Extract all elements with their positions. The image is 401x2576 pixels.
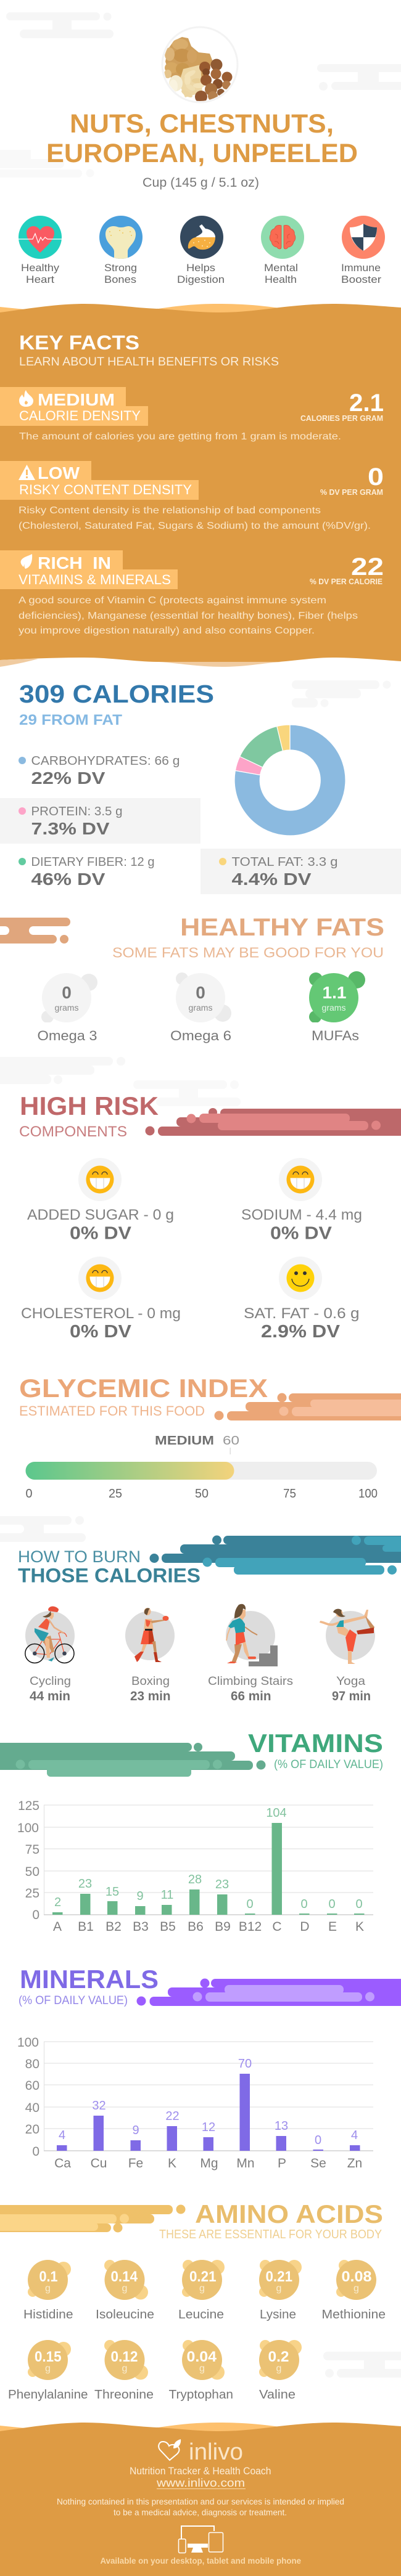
benefit labels: Digestion — [177, 274, 225, 285]
panel: key facts — [0, 304, 401, 667]
icon: mental health — [261, 216, 304, 259]
donut chart — [234, 725, 345, 836]
decoration: teal stripes — [149, 1536, 401, 1575]
bar chart: minerals: K — [168, 2156, 176, 2170]
bar chart: vitamins: 0 — [32, 1908, 39, 1922]
nutrient: dietary fiber: 46% DV — [31, 870, 105, 889]
exercise: yoga — [320, 1609, 375, 1664]
bar chart: minerals: 32 — [92, 2099, 106, 2113]
decorative clouds — [0, 1057, 241, 1106]
food image: nuts — [162, 27, 238, 103]
gauge value: 60 — [223, 1434, 239, 1448]
icon: warning — [19, 465, 35, 480]
bar chart: vitamins: 100 — [17, 1821, 39, 1835]
metric: mufas: MUFAs — [312, 1028, 359, 1043]
amino: tryptophan: g — [199, 2363, 205, 2374]
bar chart: minerals: 4 — [59, 2129, 65, 2142]
decoration: minerals stripes — [137, 1978, 401, 2006]
gauge bar — [26, 1462, 377, 1480]
component: added sugar — [27, 1158, 174, 1244]
gauge value: MEDIUM — [155, 1434, 214, 1448]
heading: glycemic index: GLYCEMIC INDEX — [19, 1374, 268, 1403]
bar chart: vitamins — [17, 1799, 373, 1934]
benefit labels: Mental — [264, 262, 298, 274]
fact: calorie density — [0, 387, 384, 442]
amino: phenylalanine: 0.15 — [35, 2349, 62, 2365]
amino: isoleucine: Isoleucine — [96, 2308, 154, 2321]
amino: threonine — [94, 2340, 154, 2402]
bar chart: vitamins: 9 — [136, 1889, 144, 1903]
amino: valine — [259, 2340, 302, 2402]
exercise labels: Yoga — [336, 1675, 365, 1688]
component: saturated fat: 2.9% DV — [261, 1322, 341, 1342]
fact: rich in vitamins and minerals — [0, 550, 384, 636]
fact: calorie density: CALORIE DENSITY — [19, 408, 141, 423]
metric: omega 3: Omega 3 — [37, 1028, 97, 1043]
amino: lysine: g — [276, 2283, 281, 2294]
amino: threonine: 0.12 — [111, 2349, 138, 2365]
subheading: (% OF DAILY VALUE) — [19, 1994, 128, 2007]
panel: glycemic index — [19, 1374, 401, 1501]
bar chart: vitamins: B12 — [239, 1920, 262, 1934]
bar chart: vitamins: 125 — [18, 1799, 39, 1813]
exercise: cycling — [25, 1607, 75, 1663]
amino: isoleucine: 0.14 — [111, 2268, 138, 2285]
icon: strong bones — [99, 216, 143, 262]
gauge axis — [26, 1487, 378, 1501]
exercise durations: 44 min — [30, 1689, 70, 1703]
panel: amino acids — [0, 2199, 386, 2402]
subheading: from fat: 29 FROM FAT — [19, 712, 122, 728]
component: cholesterol: CHOLESTEROL - 0 mg — [21, 1305, 181, 1322]
benefit labels: Immune — [341, 262, 381, 274]
benefit labels: Booster — [341, 274, 381, 285]
bar chart: vitamins: B1 — [78, 1920, 94, 1934]
icon: leaf — [21, 554, 32, 569]
heading: minerals: MINERALS — [20, 1965, 159, 1994]
component: sodium — [241, 1158, 362, 1244]
bar chart: minerals: Cu — [91, 2156, 107, 2170]
bar chart: vitamins: 25 — [25, 1886, 39, 1901]
fact: calorie density: MEDIUM — [38, 390, 115, 409]
benefit labels: Healthy — [21, 262, 60, 274]
gauge value — [155, 1434, 239, 1454]
bar chart: vitamins: 15 — [105, 1885, 119, 1899]
heading: those calories: THOSE CALORIES — [18, 1564, 200, 1586]
metric: omega 6: Omega 6 — [170, 1028, 231, 1043]
metric: mufas — [309, 971, 365, 1043]
gauge axis: 25 — [109, 1487, 122, 1501]
amino: histidine: Histidine — [23, 2308, 73, 2321]
fact: rich in vitamins and minerals: deficiencies), Manganese (essential for healthy bones), Fiber (helps — [19, 611, 358, 621]
exercise labels: Boxing — [131, 1675, 170, 1688]
exercise: boxing — [125, 1608, 175, 1662]
amino: histidine: 0.1 — [39, 2268, 58, 2285]
bar chart: vitamins: 23 — [215, 1878, 229, 1891]
amino: methionine: g — [353, 2283, 359, 2294]
nutrient: carbohydrates — [19, 754, 180, 788]
nutrient: protein: 7.3% DV — [31, 819, 110, 838]
panel: healthy fats — [0, 914, 384, 1043]
exercise labels: Climbing Stairs — [208, 1675, 293, 1688]
amino: valine: Valine — [259, 2388, 296, 2402]
benefit labels: Health — [265, 274, 297, 285]
website: www.inlivo.com — [156, 2477, 245, 2489]
panel: vitamins — [0, 1729, 383, 1934]
metric: omega 6: 0 — [196, 983, 205, 1002]
heading: vitamins: VITAMINS — [248, 1729, 383, 1758]
amino: tryptophan: Tryptophan — [169, 2388, 233, 2402]
bar chart: minerals — [17, 2036, 373, 2170]
bar chart: minerals: 9 — [132, 2124, 139, 2137]
logo: inlivo — [189, 2439, 243, 2465]
icon: digestion — [180, 216, 223, 259]
nutrient: protein: PROTEIN: 3.5 g — [31, 805, 122, 818]
exercise durations: 97 min — [332, 1689, 371, 1703]
nutrient: dietary fiber: DIETARY FIBER: 12 g — [31, 855, 154, 869]
disclaimer: Nothing contained in this presentation and our services is intended or implied — [57, 2497, 344, 2506]
title — [46, 109, 358, 168]
bar chart: vitamins: 11 — [161, 1888, 173, 1902]
amino: phenylalanine: Phenylalanine — [8, 2388, 88, 2402]
bar chart: vitamins: B2 — [105, 1920, 122, 1934]
component: added sugar: 0% DV — [70, 1224, 132, 1244]
component: sodium: SODIUM - 4.4 mg — [241, 1207, 362, 1223]
health benefits row — [19, 216, 385, 285]
exercise: climbing stairs — [226, 1604, 278, 1666]
bar chart: minerals: 100 — [17, 2036, 39, 2050]
bar chart: minerals: Zn — [347, 2156, 362, 2170]
decoration: vitamins stripes — [0, 1743, 265, 1777]
fact: risky content density: RISKY CONTENT DENSITY — [19, 482, 192, 497]
amino: methionine — [322, 2260, 386, 2321]
fact: rich in vitamins and minerals: A good source of Vitamin C (protects against immune system — [19, 595, 326, 606]
benefit labels — [21, 262, 381, 285]
bar chart: minerals: 4 — [351, 2129, 358, 2142]
amino: tryptophan: 0.04 — [186, 2349, 217, 2365]
amino: phenylalanine — [8, 2340, 88, 2402]
nutrient: total fat — [200, 849, 401, 894]
decoration: glycemic stripes — [215, 1393, 401, 1420]
nutrient: total fat: TOTAL FAT: 3.3 g — [232, 855, 338, 869]
subheading: ESTIMATED FOR THIS FOOD — [19, 1403, 205, 1419]
bar chart: minerals: 22 — [165, 2109, 180, 2123]
bar chart: vitamins: 28 — [188, 1873, 202, 1886]
bar chart: vitamins: 0 — [246, 1897, 254, 1911]
subheading: THESE ARE ESSENTIAL FOR YOUR BODY — [159, 2228, 382, 2241]
amino: methionine: Methionine — [322, 2308, 386, 2321]
fact: risky content density: Risky Content density is the relationship of bad components — [19, 505, 321, 516]
bar chart: minerals: 13 — [275, 2119, 288, 2133]
bar chart: vitamins: B6 — [188, 1920, 204, 1934]
panel: calories — [0, 680, 401, 894]
bar chart: vitamins: 23 — [78, 1877, 92, 1891]
title: NUTS, CHESTNUTS, — [70, 109, 334, 139]
bar chart: vitamins: E — [328, 1920, 337, 1934]
exercise durations: 23 min — [130, 1689, 170, 1703]
amino: tryptophan — [169, 2340, 233, 2402]
bar chart: minerals: 40 — [25, 2101, 39, 2115]
exercise durations: 66 min — [231, 1689, 271, 1703]
exercise labels: Cycling — [30, 1675, 71, 1688]
fact: calorie density: 2.1 — [349, 389, 384, 417]
metric: mufas: grams — [322, 1003, 345, 1013]
disclaimer — [57, 2497, 344, 2517]
amino: phenylalanine: g — [45, 2363, 51, 2374]
bar chart: minerals: Mn — [236, 2156, 255, 2170]
metric: omega 6: grams — [189, 1003, 212, 1013]
disclaimer: to be a medical advice, diagnosis or treatment. — [114, 2507, 287, 2517]
bar chart: vitamins: A — [53, 1920, 62, 1934]
bar chart: minerals: Se — [310, 2156, 326, 2170]
heading: calories: 309 CALORIES — [19, 680, 214, 708]
bar chart: vitamins: B5 — [160, 1920, 176, 1934]
metric: mufas: 1.1 — [323, 983, 346, 1002]
amino: leucine: g — [199, 2283, 205, 2294]
amino: threonine: Threonine — [94, 2388, 154, 2402]
gauge axis: 0 — [26, 1487, 32, 1501]
metric: omega 3: 0 — [62, 983, 72, 1002]
amino: histidine — [23, 2260, 73, 2321]
heading: high risk: HIGH RISK — [20, 1091, 159, 1120]
heading: amino acids: AMINO ACIDS — [195, 2199, 383, 2228]
fact: rich in vitamins and minerals: RICH IN — [38, 553, 111, 573]
component: saturated fat: SAT. FAT - 0.6 g — [244, 1305, 359, 1322]
exercise labels — [30, 1675, 365, 1688]
subheading: LEARN ABOUT HEALTH BENEFITS OR RISKS — [19, 355, 279, 369]
heading: healthy fats: HEALTHY FATS — [180, 914, 384, 941]
icon: immune booster — [342, 216, 385, 259]
subheading: (% OF DAILY VALUE) — [274, 1758, 383, 1771]
gauge axis: 50 — [195, 1487, 209, 1501]
fact: risky content density: 0 — [368, 463, 384, 491]
amino: lysine: Lysine — [260, 2308, 296, 2321]
bar chart: vitamins: 75 — [25, 1843, 39, 1857]
component: sodium: 0% DV — [270, 1224, 333, 1244]
gauge axis: 100 — [358, 1487, 378, 1501]
component: cholesterol — [21, 1257, 181, 1342]
amino: valine: 0.2 — [268, 2349, 289, 2365]
decoration: healthy fats stripes — [0, 918, 72, 944]
decorative cloud — [323, 2352, 401, 2378]
amino: isoleucine — [96, 2260, 154, 2321]
decorative clouds top — [0, 12, 401, 177]
benefit labels: Bones — [104, 274, 136, 285]
amino: isoleucine: g — [122, 2283, 127, 2294]
amino: leucine — [178, 2260, 225, 2321]
amino: threonine: g — [122, 2363, 127, 2374]
bar chart: vitamins: K — [355, 1920, 364, 1934]
bar chart: vitamins: 0 — [355, 1897, 363, 1911]
gauge axis: 75 — [283, 1487, 296, 1501]
fact: rich in vitamins and minerals: you improve digestion naturally) and also contains Copper. — [19, 626, 315, 636]
benefit labels: Helps — [186, 262, 215, 274]
subheading: components: COMPONENTS — [19, 1123, 127, 1140]
bar chart: minerals: 80 — [25, 2057, 39, 2071]
bar chart: minerals: 20 — [25, 2122, 39, 2137]
fact: rich in vitamins and minerals: VITAMINS & MINERALS — [19, 572, 171, 587]
fact: risky content density: (Cholesterol, Saturated Fat, Sugars & Sodium) to the amount (%DV/gr). — [19, 521, 371, 531]
nutrient: total fat: 4.4% DV — [232, 870, 312, 889]
availability note: Available on your desktop, tablet and mobile phone — [100, 2556, 301, 2566]
bar chart: vitamins: 0 — [328, 1897, 336, 1911]
icon: flame — [19, 390, 33, 407]
bar chart: vitamins: 2 — [54, 1896, 61, 1909]
bar chart: minerals: P — [278, 2156, 286, 2170]
heading: how to burn: HOW TO BURN — [18, 1547, 141, 1566]
heading: key facts: KEY FACTS — [19, 332, 139, 354]
exercise durations — [30, 1689, 371, 1703]
nutrient: dietary fiber — [19, 855, 154, 889]
subheading: SOME FATS MAY BE GOOD FOR YOU — [112, 944, 384, 960]
bar chart: minerals: Ca — [54, 2156, 71, 2170]
bar chart: minerals: 0 — [32, 2145, 39, 2159]
amino: histidine: g — [45, 2283, 51, 2294]
bar chart: vitamins: B3 — [133, 1920, 149, 1934]
bar chart: vitamins: 50 — [25, 1865, 39, 1879]
bar chart: vitamins: D — [300, 1920, 310, 1934]
amino: lysine — [259, 2260, 302, 2321]
fact: calorie density: The amount of calories you are getting from 1 gram is moderate. — [19, 431, 341, 442]
bar chart: minerals: Fe — [128, 2156, 143, 2170]
fact: risky content density: % DV PER GRAM — [320, 487, 383, 497]
bar chart: vitamins: C — [272, 1920, 282, 1934]
nutrient: protein — [0, 798, 200, 844]
icon: healthy heart — [19, 216, 62, 259]
bar chart: vitamins: B9 — [215, 1920, 231, 1934]
component: saturated fat — [244, 1257, 359, 1342]
metric: omega 6 — [170, 972, 231, 1043]
amino: leucine: Leucine — [178, 2308, 224, 2321]
nutrient: carbohydrates: CARBOHYDRATES: 66 g — [31, 754, 180, 768]
amino: methionine: 0.08 — [342, 2268, 371, 2285]
panel: footer — [0, 2423, 401, 2576]
bar chart: minerals: 12 — [202, 2121, 215, 2134]
fact: rich in vitamins and minerals: 22 — [351, 553, 384, 581]
benefit labels: Strong — [104, 262, 137, 274]
amino: lysine: 0.21 — [265, 2268, 292, 2285]
title: EUROPEAN, UNPEELED — [46, 139, 358, 168]
bar chart: vitamins: 104 — [266, 1806, 287, 1820]
metric: omega 3 — [37, 973, 97, 1043]
component: cholesterol: 0% DV — [70, 1322, 132, 1342]
logo — [159, 2439, 243, 2465]
decoration: amino stripes — [0, 2205, 185, 2232]
component: added sugar: ADDED SUGAR - 0 g — [27, 1207, 174, 1223]
panel: how to burn those calories — [18, 1536, 401, 1703]
decorative cloud — [292, 680, 391, 707]
fact: risky content density: LOW — [38, 463, 80, 483]
fact: risky content density — [0, 461, 384, 531]
amino: valine: g — [276, 2363, 281, 2374]
fact: calorie density: CALORIES PER GRAM — [300, 414, 383, 423]
bar chart: minerals: 0 — [315, 2134, 321, 2147]
bar chart: vitamins: 0 — [300, 1897, 308, 1911]
serving size: Cup (145 g / 5.1 oz) — [143, 176, 259, 190]
bar chart: minerals: Mg — [200, 2156, 218, 2170]
decoration: high risk stripes — [146, 1108, 401, 1136]
panel: minerals — [17, 1965, 401, 2170]
nutrient: carbohydrates: 22% DV — [31, 768, 105, 788]
panel: high risk components — [19, 1091, 401, 1342]
amino: leucine: 0.21 — [189, 2268, 216, 2285]
fact: rich in vitamins and minerals: % DV PER CALORIE — [310, 577, 382, 586]
decorative cloud — [0, 1516, 86, 1542]
tagline: Nutrition Tracker & Health Coach — [130, 2465, 271, 2477]
bar chart: minerals: 70 — [238, 2057, 252, 2071]
bar chart: minerals: 60 — [25, 2079, 39, 2093]
metric: omega 3: grams — [55, 1003, 78, 1013]
icon: devices — [179, 2526, 223, 2553]
benefit labels: Heart — [26, 274, 54, 285]
